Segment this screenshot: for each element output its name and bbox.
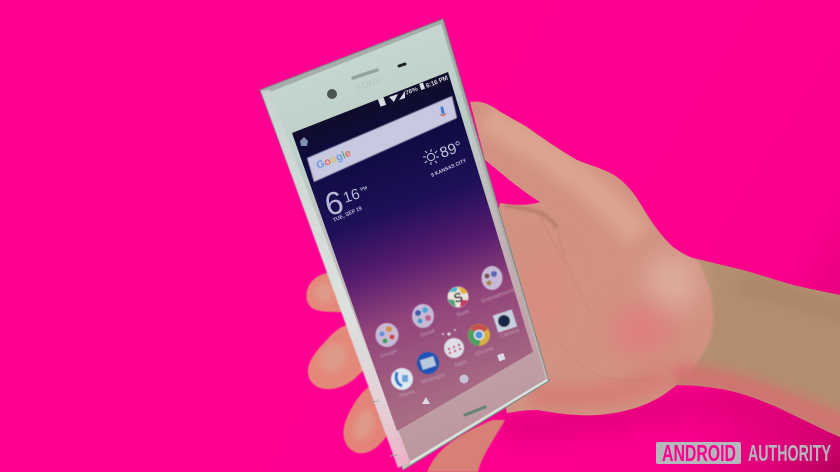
phone app: Phone <box>399 389 416 400</box>
chrome: Chrome <box>475 346 495 358</box>
battery percentage: 76% <box>405 86 420 97</box>
entertainment folder <box>481 266 515 305</box>
sun icon <box>423 149 439 165</box>
bar <box>307 96 457 182</box>
ring finger <box>343 385 390 453</box>
temperature: 89° <box>438 138 465 162</box>
weather widget <box>423 138 468 179</box>
notification shape <box>300 137 308 146</box>
middle finger <box>308 324 372 389</box>
front camera <box>327 89 337 99</box>
little finger <box>427 420 505 472</box>
wrist upper shade <box>740 285 840 315</box>
messages app <box>417 352 446 386</box>
side buttons <box>371 401 398 456</box>
brand: SONY <box>355 75 382 93</box>
thumb web shadow <box>505 205 557 228</box>
sensor <box>399 64 405 66</box>
page dots <box>442 329 456 336</box>
lower edge highlight <box>410 380 547 463</box>
google logo: Google <box>315 147 353 172</box>
time: 6:16 PM <box>425 75 449 90</box>
surface shadow under hand <box>500 402 840 450</box>
slack: S <box>452 289 465 306</box>
palm red flush <box>608 304 676 356</box>
hand <box>306 90 840 472</box>
phone app <box>391 368 416 400</box>
search bar <box>307 96 457 182</box>
clock <box>321 184 368 224</box>
messages app: Messages <box>421 372 446 386</box>
finger highlights <box>314 283 378 443</box>
slack: Slack <box>456 309 471 319</box>
camera app: Camera <box>500 327 521 340</box>
screen <box>292 72 533 431</box>
lower palm <box>530 375 665 397</box>
apps launcher: Apps <box>454 359 468 369</box>
apps launcher <box>444 338 468 369</box>
earpiece <box>353 70 377 78</box>
badge <box>656 442 741 464</box>
mic icon <box>442 108 443 113</box>
minutes: 16 <box>341 185 362 207</box>
am/pm: PM <box>360 185 368 192</box>
google folder <box>376 323 398 360</box>
left metal side band <box>261 90 410 468</box>
palm, thumb and wrist <box>460 90 840 450</box>
status bar <box>378 75 449 107</box>
chrome <box>468 324 495 358</box>
city: 9 KANSAS CITY <box>430 158 468 179</box>
photo: hand holding phone on pink background <box>260 18 840 472</box>
slack <box>448 286 471 319</box>
battery <box>419 82 425 90</box>
watermark <box>656 440 831 466</box>
top bezel details <box>327 64 405 99</box>
palm creases <box>540 215 650 381</box>
back button <box>422 397 430 404</box>
camera app <box>493 309 521 340</box>
phone <box>260 19 549 470</box>
entertainment folder: Entertainment <box>481 287 515 305</box>
wrist knuckle highlight <box>646 253 698 313</box>
thumb shading <box>485 118 640 235</box>
bottom speaker <box>465 407 485 415</box>
android word: ANDROID <box>662 440 736 466</box>
phone frame <box>260 19 549 470</box>
wrist <box>671 258 840 437</box>
front glass <box>270 24 546 461</box>
signal icons <box>389 91 405 102</box>
nfc icon <box>378 97 386 107</box>
google folder: Google <box>380 348 398 360</box>
palm base <box>460 90 840 450</box>
hour: 6 <box>321 184 347 223</box>
home button <box>460 374 468 384</box>
date: TUE, SEP 19 <box>332 206 363 224</box>
recents button <box>497 353 505 361</box>
wrist red underside <box>672 375 840 428</box>
index finger <box>306 272 348 312</box>
social folder: Social <box>420 328 436 339</box>
fingers behind phone <box>306 272 505 472</box>
social folder <box>412 304 436 339</box>
palm near phone flush <box>525 250 565 340</box>
navigation bar <box>422 353 505 404</box>
app icons <box>376 266 521 400</box>
